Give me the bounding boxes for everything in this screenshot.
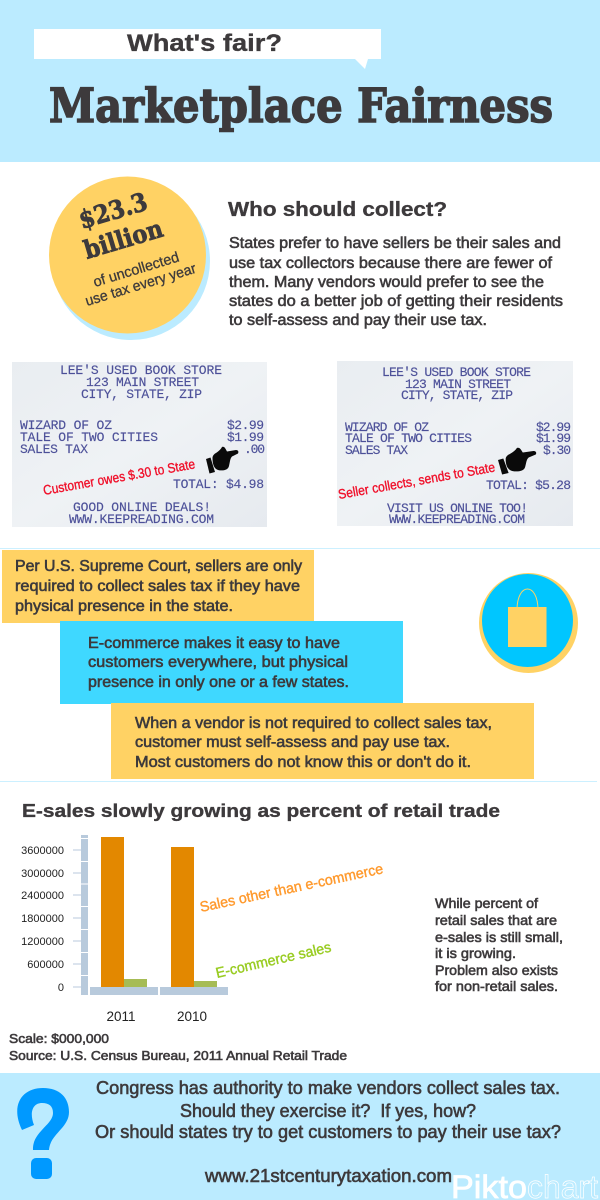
y axis: 0: [58, 982, 64, 994]
text block: chart note: for non-retail sales.: [435, 978, 558, 994]
panel: use tax: [111, 703, 534, 779]
panel: e-commerce: E-commerce makes it easy to have: [88, 635, 340, 652]
receipt: seller collects: 123 MAIN STREET: [405, 377, 511, 392]
callout: $23.3 billion: [49, 176, 210, 340]
icon: shopping bag: [479, 573, 578, 673]
receipt: seller collects: [337, 361, 573, 527]
text block: chart note: it is growing.: [435, 945, 516, 961]
callout: $23.3 billion: of uncollected: [91, 250, 181, 291]
panel: use tax: When a vendor is not required to collect sales tax,: [135, 715, 492, 732]
receipt: seller collects: TALE OF TWO CITIES: [345, 431, 472, 446]
x labels: 2010: [177, 1009, 207, 1024]
panel: e-commerce: customers everywhere, but physical: [88, 654, 348, 671]
icon: pointing hand: [206, 447, 238, 474]
bar chart: [21, 835, 228, 1024]
y axis: 1800000: [21, 913, 64, 925]
footer panel: [0, 1073, 600, 1200]
receipt: customer owes: $1.99: [227, 430, 264, 445]
text block: chart note: While percent of: [435, 895, 538, 911]
panel: supreme court: [2, 550, 314, 623]
x labels: [106, 1009, 207, 1024]
text block: who should collect: them. Many vendors would prefer to see the: [229, 274, 544, 291]
receipt: seller collects: $2.99: [536, 420, 571, 435]
callout: $23.3 billion: $23.3: [75, 187, 151, 235]
floor: [90, 987, 228, 995]
panel: e-commerce: [60, 621, 403, 704]
panel: use tax: customer must self-assess and pay use tax.: [135, 734, 450, 751]
receipt: customer owes: TOTAL: $4.98: [173, 477, 264, 492]
text block: closing questions: [95, 1078, 561, 1142]
y axis: 3000000: [21, 868, 64, 880]
watermark: Piktochart: [451, 1169, 598, 1200]
panel: supreme court: physical presence in the state.: [15, 598, 233, 615]
text block: closing questions: Or should states try to get customers to pay their use tax?: [95, 1122, 561, 1142]
icon: pointing hand: [498, 448, 536, 474]
text block: who should collect: use tax collectors because there are fewer of: [229, 255, 553, 272]
heading: who should collect: Who should collect?: [228, 199, 447, 221]
receipt: seller collects: LEE'S USED BOOK STORE: [382, 365, 531, 380]
receipt: customer owes: 123 MAIN STREET: [86, 375, 199, 390]
receipt: customer owes: WIZARD OF OZ: [20, 418, 112, 433]
receipt: customer owes: LEE'S USED BOOK STORE: [60, 363, 222, 378]
y axis: 2400000: [21, 890, 64, 902]
annotation: seller collects: Seller collects, sends to State: [337, 460, 496, 502]
receipt: customer owes: TALE OF TWO CITIES: [20, 430, 158, 445]
receipt: seller collects: TOTAL: $5.28: [486, 478, 571, 493]
bars 2011: [101, 837, 147, 987]
speech bubble: What's fair?: [34, 29, 381, 69]
receipt: seller collects: WWW.KEEPREADING.COM: [389, 512, 525, 527]
heading: e-sales chart: E-sales slowly growing as percent of retail trade: [22, 801, 500, 821]
callout: $23.3 billion: use tax every year: [83, 261, 198, 310]
speech bubble: What's fair?: What's fair?: [127, 30, 282, 57]
icon: question mark: [17, 1088, 69, 1179]
text block: chart note: e-sales is still small,: [435, 929, 563, 945]
receipt: customer owes: $2.99: [227, 418, 264, 433]
text block: who should collect: [229, 235, 563, 329]
text block: closing questions: Should they exercise it? If yes, how?: [180, 1101, 476, 1121]
receipt: customer owes: WWW.KEEPREADING.COM: [69, 512, 214, 527]
receipt: seller collects: WIZARD OF OZ: [345, 420, 429, 435]
y axis: 1200000: [21, 936, 64, 948]
receipt: customer owes: CITY, STATE, ZIP: [81, 387, 202, 402]
panel: supreme court: Per U.S. Supreme Court, sellers are only: [15, 558, 302, 575]
x labels: 2011: [106, 1009, 136, 1024]
text block: chart note: retail sales that are: [435, 912, 557, 928]
label: e-commerce sales: E-commerce sales: [214, 940, 333, 982]
y axis: 3600000: [21, 845, 64, 857]
receipt: seller collects: SALES TAX: [345, 443, 408, 458]
panel: e-commerce: presence in only one or a few states.: [88, 674, 349, 691]
panel: use tax: Most customers do not know this or don't do it.: [135, 754, 471, 771]
text block: who should collect: States prefer to have sellers be their sales and: [229, 235, 561, 252]
website url: www.21stcenturytaxation.com: [204, 1166, 452, 1186]
receipt: customer owes: SALES TAX: [20, 442, 88, 457]
text block: chart note: Problem also exists: [435, 962, 558, 978]
annotation: customer owes: Customer owes $.30 to State: [42, 456, 196, 498]
receipt: seller collects: $1.99: [536, 431, 571, 446]
receipt: seller collects: $.30: [543, 443, 571, 458]
receipt: seller collects: CITY, STATE, ZIP: [401, 388, 513, 403]
y axis: 600000: [27, 959, 64, 971]
receipt: customer owes: .00: [244, 442, 265, 457]
text block: who should collect: states do a better job of getting their residents: [229, 293, 563, 310]
label: sales other than e-commerce: Sales other than e-commerce: [199, 861, 385, 916]
receipt: seller collects: VISIT US ONLINE TOO!: [387, 501, 528, 516]
text block: who should collect: to self-assess and pay their use tax.: [229, 312, 487, 329]
receipt: customer owes: [12, 362, 267, 527]
text block: closing questions: Congress has authority to make vendors collect sales tax.: [96, 1078, 560, 1098]
text block: chart note: [435, 895, 563, 994]
panel: supreme court: required to collect sales tax if they have: [15, 578, 300, 595]
text block: scale and source: Scale: $000,000: [9, 1031, 109, 1046]
text block: scale and source: [9, 1031, 347, 1063]
header banner: [0, 0, 600, 162]
bars 2010: [171, 847, 217, 987]
text block: scale and source: Source: U.S. Census Bureau, 2011 Annual Retail Trade: [9, 1048, 347, 1063]
callout: $23.3 billion: billion: [80, 214, 166, 265]
receipt: customer owes: GOOD ONLINE DEALS!: [73, 500, 211, 515]
y axis: [21, 835, 89, 995]
